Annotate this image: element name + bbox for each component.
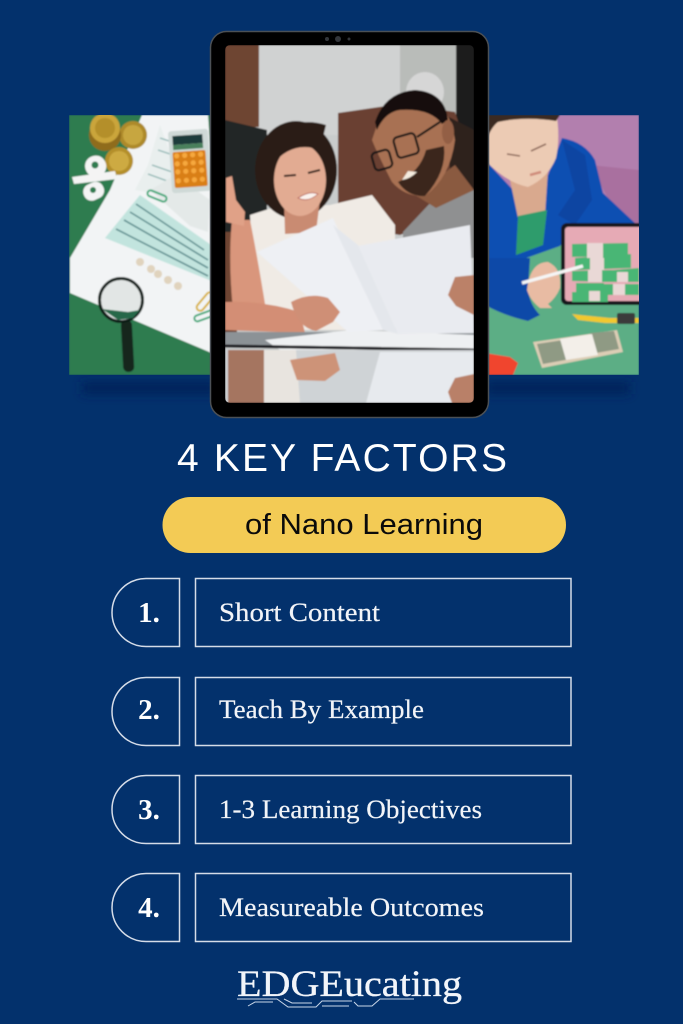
number badge 3 — [112, 776, 180, 844]
photo: woman with tablet and money — [485, 115, 645, 375]
logo: EDGEucating: EDGEucating — [237, 964, 462, 1005]
calculator — [168, 129, 212, 193]
table — [489, 244, 639, 375]
label box 2: Teach By Example — [219, 695, 424, 724]
woman's hand — [291, 296, 340, 331]
camera dots — [325, 36, 350, 42]
upper form — [138, 130, 170, 190]
number badge 4 — [112, 874, 180, 942]
subtitle pill: of Nano Learning — [245, 509, 483, 541]
hand and pen — [522, 262, 583, 308]
receipt — [155, 180, 210, 232]
number badge 3: 3. — [138, 794, 160, 826]
infographic canvas — [69, 30, 639, 1008]
watch — [572, 313, 639, 324]
tablet — [561, 223, 645, 305]
number badge 1 — [112, 578, 180, 646]
beads — [136, 258, 182, 290]
tax paper — [70, 115, 214, 354]
photo: couple reading papers — [225, 45, 474, 403]
red object — [485, 353, 518, 375]
number badge 4: 4. — [138, 892, 160, 924]
tax form — [105, 195, 214, 282]
left paper — [257, 218, 383, 332]
man — [371, 90, 474, 258]
subtitle pill — [162, 497, 566, 553]
monitor — [225, 120, 267, 232]
factor 2 — [112, 678, 571, 746]
number badge 1: 1. — [138, 597, 160, 629]
circuit lines — [237, 999, 414, 1007]
right paper — [358, 225, 474, 334]
banknotes — [533, 330, 623, 368]
coins — [89, 113, 147, 175]
tablet device — [210, 32, 488, 418]
number badge 2 — [112, 678, 180, 746]
dark cabinet — [454, 45, 474, 131]
paper clips — [147, 189, 216, 322]
title: 4 KEY FACTORS — [177, 437, 507, 480]
neck and top — [510, 170, 548, 218]
label box 4 — [196, 874, 571, 942]
shadow: right photo — [485, 382, 630, 394]
tablet body — [210, 32, 488, 418]
label box 3: 1-3 Learning Objectives — [219, 795, 482, 824]
table and papers — [225, 332, 474, 347]
reflection on table — [225, 350, 474, 403]
factor 1 — [112, 578, 571, 646]
factor 4 — [112, 874, 571, 942]
label box 3 — [196, 776, 571, 844]
factor 3 — [112, 776, 571, 844]
percent sign — [72, 152, 117, 203]
glasses — [371, 122, 440, 171]
raised arm — [230, 220, 266, 310]
magnifier — [100, 278, 142, 372]
blazer — [485, 138, 636, 321]
number badge 2: 2. — [138, 694, 160, 726]
label box 1: Short Content — [219, 598, 381, 627]
label box 2 — [196, 678, 571, 746]
label box 4: Measureable Outcomes — [219, 893, 484, 922]
forearm on table — [225, 302, 305, 333]
label box 1 — [196, 578, 571, 646]
woman — [226, 121, 395, 330]
face — [485, 117, 558, 187]
lamp — [406, 72, 444, 103]
man's hand — [448, 275, 474, 315]
photo: tax forms and coins — [69, 113, 216, 375]
wood panels — [225, 45, 259, 127]
shadow: left photo — [82, 382, 217, 394]
